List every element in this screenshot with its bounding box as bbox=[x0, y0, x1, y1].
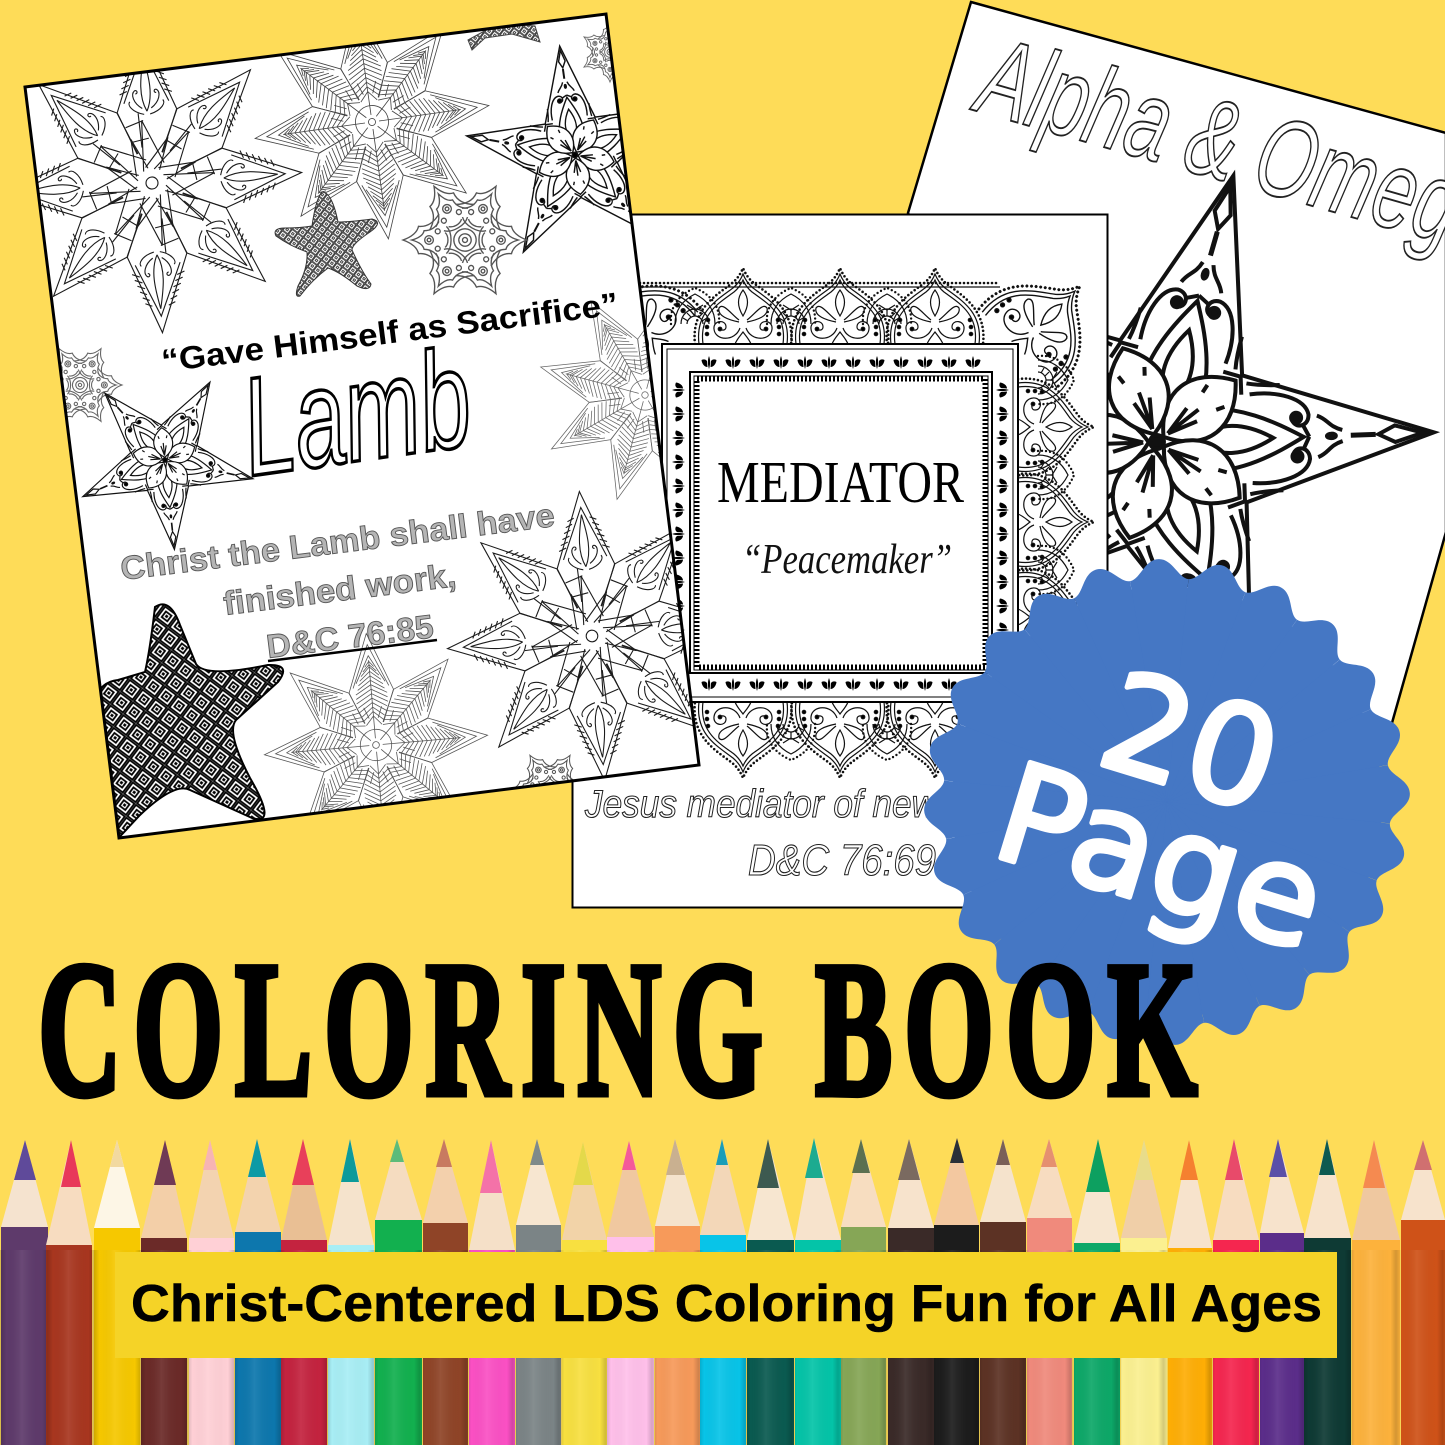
pencil 14 bbox=[607, 1141, 654, 1445]
verse text: Christ the Lamb: D&C 76:85 bbox=[264, 607, 436, 665]
mandala border bbox=[561, 247, 1119, 778]
title: COLORING BOOK: COLORING BOOK bbox=[38, 923, 1209, 1136]
row of colored pencils bbox=[0, 1138, 1445, 1445]
pencil 1 bbox=[1, 1140, 48, 1445]
panel: left coloring page, Lamb bbox=[23, 12, 701, 840]
pencil 16 bbox=[700, 1139, 746, 1445]
star illustrations bbox=[37, 22, 693, 839]
pencil 2 bbox=[46, 1140, 92, 1445]
pencil 18 bbox=[795, 1138, 841, 1445]
pencil 9 bbox=[375, 1139, 422, 1445]
pencil 10 bbox=[423, 1139, 468, 1445]
pencil 29 bbox=[1304, 1139, 1351, 1445]
pencil 4 bbox=[141, 1140, 187, 1445]
pencil 6 bbox=[235, 1139, 281, 1445]
pencil 3 bbox=[94, 1140, 140, 1445]
pencil 24 bbox=[1074, 1139, 1120, 1445]
subtitle: Gave Himself as Sacrifice: “Gave Himself as Sacrifice” bbox=[159, 286, 620, 379]
verse text: Christ the Lamb bbox=[118, 496, 557, 665]
pencil 21 bbox=[934, 1138, 979, 1445]
badge number: 20: 20 bbox=[1083, 642, 1297, 845]
pencil 22 bbox=[980, 1139, 1026, 1445]
scalloped blue seal bbox=[916, 551, 1418, 1053]
pencil 17 bbox=[747, 1139, 794, 1445]
pencil 26 bbox=[1168, 1140, 1212, 1445]
tagline band bbox=[115, 1252, 1337, 1358]
pencil 28 bbox=[1260, 1139, 1304, 1445]
subheading: Peacemaker: “Peacemaker” bbox=[742, 537, 952, 583]
pencil 20 bbox=[888, 1139, 934, 1445]
pencil 25 bbox=[1121, 1140, 1167, 1445]
pencil 13 bbox=[562, 1142, 607, 1445]
pencil 5 bbox=[189, 1140, 234, 1445]
verse text: Christ the Lamb: finished work, bbox=[221, 556, 458, 622]
pencil 12 bbox=[516, 1139, 561, 1445]
verse text: Jesus mediator: Jesus mediator of new bbox=[584, 783, 940, 826]
heading: Lamb: Lamb bbox=[232, 319, 480, 506]
pencil 11 bbox=[469, 1140, 515, 1445]
tagline text: Christ-Centered LDS Coloring Fun for All Ages bbox=[131, 1275, 1322, 1333]
heading: MEDIATOR: MEDIATOR bbox=[717, 449, 965, 515]
pencil 15 bbox=[655, 1139, 700, 1445]
pencil 30 bbox=[1352, 1140, 1400, 1445]
panel: right coloring page, Alpha & Omega bbox=[906, 0, 1445, 723]
pencil 23 bbox=[1027, 1139, 1072, 1445]
pencil 8 bbox=[328, 1139, 374, 1445]
square ornamental frame bbox=[662, 344, 1018, 702]
badge word: Page: Page bbox=[978, 734, 1342, 983]
verse text: Christ the Lamb: Christ the Lamb shall have bbox=[118, 496, 557, 587]
illustration: large flower star bbox=[1108, 170, 1440, 593]
pencil 31 bbox=[1401, 1140, 1445, 1445]
verse reference: D&C 76:69: D&C 76:69 bbox=[748, 836, 936, 885]
pencil 27 bbox=[1213, 1139, 1259, 1445]
pencil 7 bbox=[281, 1139, 327, 1445]
pencil 19 bbox=[841, 1139, 886, 1445]
panel: middle coloring page, Mediator bbox=[561, 214, 1119, 908]
badge: 20 Page bbox=[916, 551, 1418, 1053]
